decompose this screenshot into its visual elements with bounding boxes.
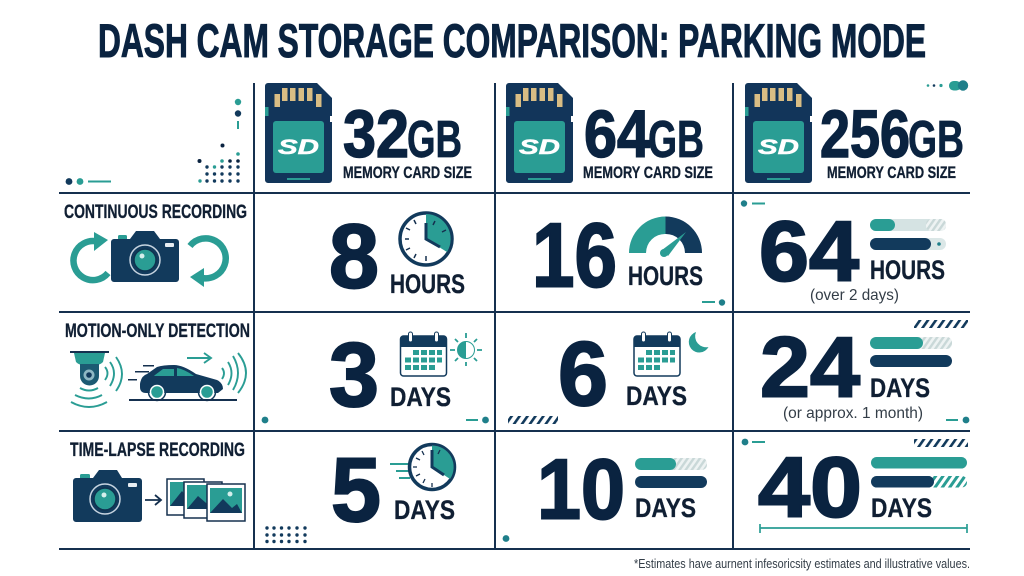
icon: calendar — [400, 332, 447, 376]
unit days: DAYS — [635, 493, 696, 523]
row label: continuous recording: CONTINUOUS RECORDING — [64, 201, 247, 223]
unit GB: GB — [407, 111, 462, 169]
cell: motion 256GB 24 days — [760, 320, 969, 423]
note over 2 days: (over 2 days) — [810, 287, 899, 304]
icon: moon — [689, 332, 708, 352]
value 24: 24 — [760, 320, 860, 416]
caption memory card size: MEMORY CARD SIZE — [583, 163, 713, 182]
value 64: 64 — [759, 204, 859, 300]
icon: gauge — [629, 216, 702, 257]
accent — [742, 439, 765, 445]
row label: continuous recording — [64, 201, 247, 287]
decorative top right dots — [927, 80, 968, 91]
progress bars — [871, 457, 967, 488]
value 10: 10 — [537, 442, 625, 538]
panel: 64GB header — [506, 83, 713, 183]
accent hatch — [508, 416, 558, 424]
panel: empty corner with decorative dots — [66, 99, 241, 185]
value 40: 40 — [758, 440, 862, 536]
unit days: DAYS — [626, 381, 687, 411]
accent hatch — [914, 439, 968, 447]
note approx 1 month: (or approx. 1 month) — [783, 405, 923, 422]
icon: calendar — [634, 332, 680, 376]
panel: 32GB header — [265, 83, 472, 183]
unit hours: HOURS — [870, 255, 945, 285]
cell: time-lapse 64GB 10 days — [503, 442, 707, 542]
cell: motion 64GB 6 days — [508, 324, 708, 425]
capacity 64GB: 64 — [584, 97, 650, 172]
row label: time-lapse recording — [70, 439, 245, 522]
icon: camera with loop arrows — [73, 231, 226, 287]
icon: SD card 32GB — [265, 83, 332, 183]
value 6: 6 — [558, 324, 608, 425]
cell: motion 32GB 3 days — [262, 325, 489, 426]
unit hours: HOURS — [628, 261, 703, 291]
unit hours: HOURS — [390, 269, 465, 299]
icon: SD card 32GB: SD — [278, 136, 319, 159]
caption memory card size: MEMORY CARD SIZE — [827, 163, 956, 182]
value 16: 16 — [532, 206, 617, 306]
row label: motion-only detection: MOTION-ONLY DETECTION — [65, 320, 250, 342]
unit GB: GB — [908, 111, 964, 169]
accent dot — [503, 535, 509, 542]
accent — [946, 417, 969, 423]
unit days: DAYS — [390, 382, 451, 412]
capacity 256GB: 256 — [820, 97, 910, 172]
progress bars — [870, 337, 952, 367]
icon: dome camera and car — [70, 351, 246, 407]
unit days: DAYS — [870, 373, 930, 403]
cell: continuous 32GB 8 hours — [329, 206, 465, 308]
icon: clock — [400, 213, 452, 265]
cell: continuous 64GB 16 hours — [532, 206, 725, 306]
progress bars — [870, 219, 946, 250]
panel: 256GB header — [745, 80, 968, 183]
cell: time-lapse 32GB 5 days — [265, 440, 455, 543]
accent — [702, 299, 725, 306]
accent — [741, 200, 765, 207]
accents — [262, 417, 489, 423]
value 3: 3 — [329, 325, 379, 426]
cell: continuous 256GB 64 hours — [741, 200, 946, 304]
icon: SD card 256GB: SD — [758, 136, 799, 159]
unit days: DAYS — [871, 493, 932, 523]
footnote: *Estimates have aurnent infesoricsity estimates and illustrative values. — [634, 557, 970, 571]
icon: SD card 64GB: SD — [519, 136, 560, 159]
comparison table grid — [59, 83, 970, 549]
unit days: DAYS — [394, 495, 455, 525]
value 5: 5 — [331, 440, 381, 541]
capacity 32GB: 32 — [343, 97, 409, 172]
icon: sun — [450, 333, 482, 366]
range bracket — [760, 524, 967, 533]
value 8: 8 — [329, 206, 379, 308]
accent hatch — [914, 320, 968, 328]
caption memory card size: MEMORY CARD SIZE — [343, 163, 472, 182]
icon: SD card 64GB — [506, 83, 573, 183]
accent dots — [265, 526, 307, 543]
cell: time-lapse 256GB 40 days — [742, 439, 968, 536]
row label: time-lapse recording: TIME-LAPSE RECORDING — [70, 439, 245, 461]
progress bars — [635, 458, 707, 488]
icon: camera with photo stack — [73, 470, 245, 522]
unit GB: GB — [648, 111, 704, 169]
row label: motion-only detection — [65, 320, 250, 407]
icon: SD card 256GB — [745, 83, 812, 183]
icon: fast clock — [390, 444, 454, 490]
